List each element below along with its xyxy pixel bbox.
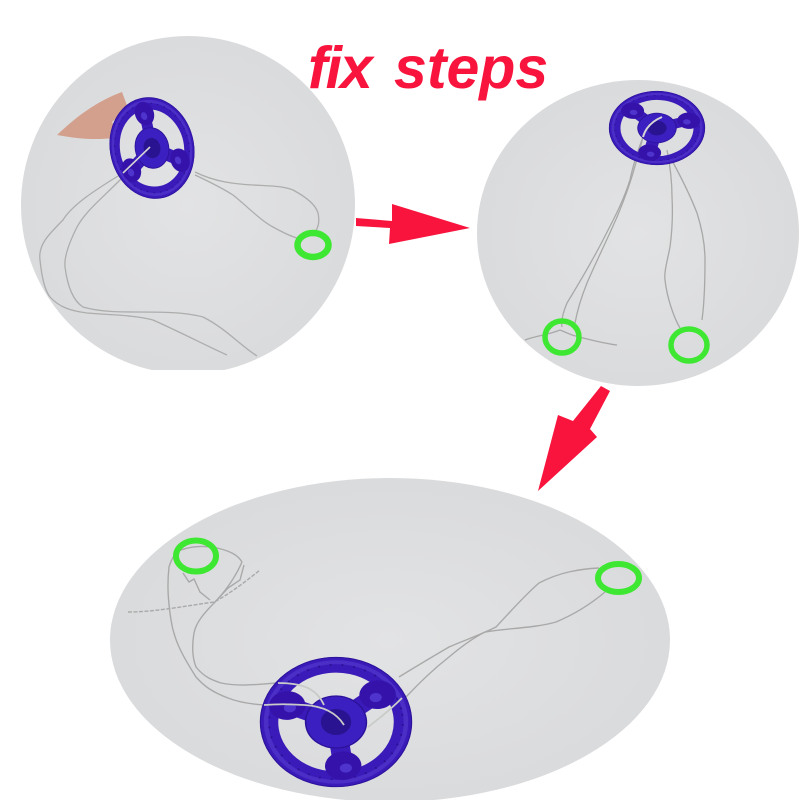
title: fix [308, 35, 375, 101]
icon: strings over wheel [264, 683, 402, 727]
icon: blue wheel [600, 84, 714, 172]
icon: strings [525, 117, 705, 345]
panel: step 3 photo [110, 478, 670, 800]
icon: large blue wheel [251, 649, 421, 795]
arrow: step 1 to step 2 [356, 204, 470, 244]
icon: green ring left [176, 540, 216, 572]
icon: green ring left [545, 321, 579, 353]
icon: blue wheel [109, 97, 195, 199]
panel: step 2 photo [477, 80, 799, 386]
arrow: step 2 to step 3 [538, 386, 610, 491]
icon: green ring right [671, 329, 707, 361]
title: steps [394, 35, 548, 101]
panel: step 1 photo [21, 36, 355, 374]
icon: green ring right [598, 564, 639, 592]
title [308, 35, 548, 101]
icon: green ring [298, 233, 328, 257]
icon: string loop left [39, 172, 320, 356]
icon: hand holding wheel [57, 92, 128, 139]
icon: strings [128, 546, 605, 705]
